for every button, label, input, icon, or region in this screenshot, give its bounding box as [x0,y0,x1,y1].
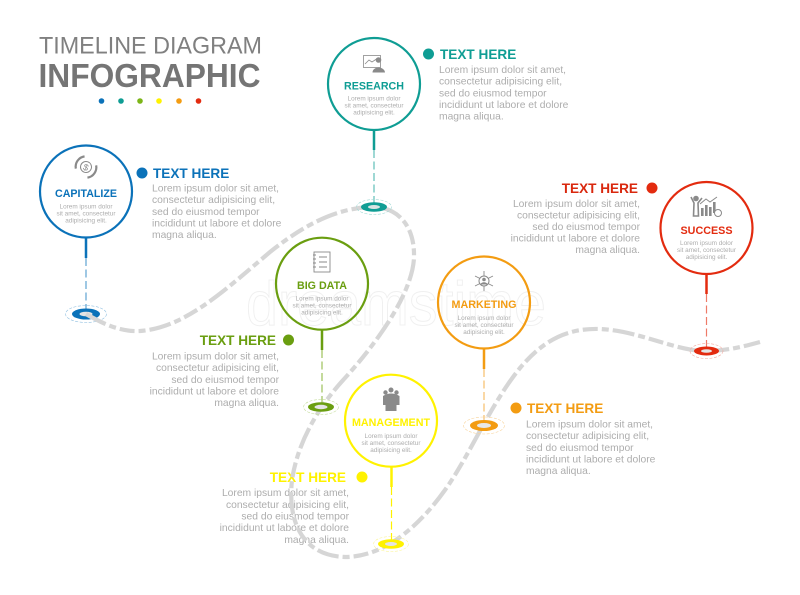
caption: big data: sit amet, consectetur [293,302,352,310]
icon: notebook [313,252,330,272]
text block: research: Lorem ipsum dolor sit amet, [439,65,566,76]
caption: success: adipisicing elit. [686,254,728,261]
text block: marketing [510,401,656,477]
marker: big data [304,400,338,414]
text block: marketing: Lorem ipsum dolor sit amet, [526,420,653,430]
text block: research: TEXT HERE [440,47,516,62]
stem: marketing [483,349,485,422]
text block: capitalize [136,166,282,241]
text block: capitalize: consectetur adipisicing elit, [152,195,275,206]
dashed road timeline [86,207,760,557]
caption: capitalize: Lorem ipsum dolor [60,204,113,210]
text block: success: Lorem ipsum dolor sit amet, [513,199,640,210]
text block: research [423,47,569,122]
text block: marketing: sed do eiusmod tempor [526,443,634,454]
caption: capitalize: adipisicing elit. [65,218,107,224]
caption: marketing: Lorem ipsum dolor [458,315,511,322]
title colour dots [99,98,201,104]
caption: marketing: adipisicing elit. [463,329,505,336]
text block: management: Lorem ipsum dolor sit amet, [222,488,349,499]
caption: research: Lorem ipsum dolor [348,96,401,102]
label: success: SUCCESS [680,225,732,237]
caption: management: adipisicing elit. [370,447,412,454]
label: management: MANAGEMENT [352,417,430,429]
text block: big data: consectetur adipisicing elit, [156,363,279,374]
panel: marketing [438,256,530,422]
caption: marketing: sit amet, consectetur [455,322,514,329]
caption: management: Lorem ipsum dolor [365,433,418,440]
marker: capitalize [66,306,106,322]
text block: management: incididunt ut labore et dolore [220,523,349,534]
caption: research: adipisicing elit. [353,110,395,116]
text block: capitalize: Lorem ipsum dolor sit amet, [152,184,279,194]
icon: money cycle [73,155,99,179]
circle: research [328,38,420,130]
text block: research: magna aliqua. [439,112,504,122]
stem: capitalize [85,238,87,311]
marker: success [690,344,723,358]
caption: big data: adipisicing elit. [301,310,343,316]
text block: capitalize: sed do eiusmod tempor [152,207,260,218]
icon: person with rising chart [691,196,722,216]
text block: management: magna aliqua. [284,535,349,546]
caption: capitalize: sit amet, consectetur [57,210,116,218]
label: capitalize: CAPITALIZE [55,188,117,200]
text block: big data: magna aliqua. [214,398,279,409]
text block: management [220,470,368,546]
title: TIMELINE DIAGRAM [39,34,262,60]
marker: management [374,536,408,552]
circle: management [345,375,437,467]
marker: marketing [464,417,504,434]
text block: big data: Lorem ipsum dolor sit amet, [152,352,279,362]
text block: success: TEXT HERE [562,181,638,196]
caption: research: sit amet, consectetur [345,102,404,110]
stem: research [373,130,375,204]
circle: big data [276,238,368,330]
text block: success [511,181,658,256]
panel: capitalize [40,146,132,322]
panel: big data [276,238,368,404]
stem: big data [321,330,323,404]
text block: capitalize: incididunt ut labore et dolore [152,218,282,230]
text block: marketing: TEXT HERE [527,401,603,416]
circle: success [660,182,752,274]
stem: success [705,274,708,348]
text block: big data [150,333,294,409]
caption: big data: Lorem ipsum dolor [296,296,349,302]
text block: marketing: consectetur adipisicing elit, [526,431,649,442]
text block: management: consectetur adipisicing elit, [226,500,349,511]
text block: marketing: magna aliqua. [526,466,591,477]
text block: big data: sed do eiusmod tempor [171,375,280,386]
title: INFOGRAPHIC [38,57,260,94]
panel: research [328,38,420,204]
panel: management [345,375,437,541]
stem: management [390,467,393,541]
text block: research: incididunt ut labore et dolore [439,100,569,111]
text block: success: consectetur adipisicing elit, [517,210,640,222]
circle: capitalize [40,146,132,238]
label: marketing: MARKETING [452,299,516,311]
text block: capitalize: TEXT HERE [153,166,229,181]
text block: marketing: incididunt ut labore et dolore [526,454,656,466]
caption: success: Lorem ipsum dolor [680,240,734,247]
text block: research: consectetur adipisicing elit, [439,76,562,88]
watermark: dreamstime [246,270,546,339]
marker: research [356,200,392,214]
text block: big data: TEXT HERE [200,333,276,348]
label: research: RESEARCH [344,80,404,92]
text block: research: sed do eiusmod tempor [439,88,547,100]
icon: network hub [475,271,493,291]
icon: group of people [383,388,400,411]
text block: management: TEXT HERE [270,470,346,485]
title [38,34,262,94]
icon: presenter with chart [364,56,385,72]
text block: success: incididunt ut labore et dolore [511,234,640,244]
panel: success [660,182,752,348]
caption: management: sit amet, consectetur [362,440,421,447]
text block: management: sed do eiusmod tempor [241,512,350,522]
text block: big data: incididunt ut labore et dolore [150,386,279,398]
icon: money cycle: $ [82,162,90,173]
text block: capitalize: magna aliqua. [152,230,217,241]
text block: success: magna aliqua. [575,245,640,256]
circle: marketing [438,256,530,348]
text block: success: sed do eiusmod tempor [532,222,641,233]
caption: success: sit amet, consectetur [677,247,737,254]
label: big data: BIG DATA [297,280,347,292]
